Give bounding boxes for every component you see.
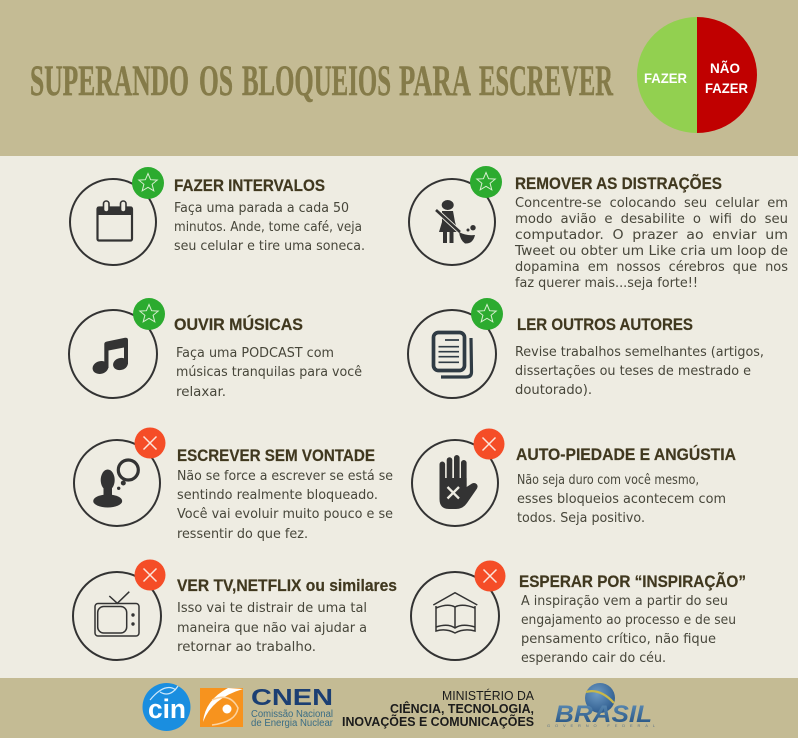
title: BLOQUEIOS [242,58,391,105]
item: ouvir músicas [69,298,362,400]
legend: fazer / não fazer: NÃO [710,59,740,76]
logo: ministério: INOVAÇÕES E COMUNICAÇÕES [342,714,534,729]
text: esperando cair do céu. [521,650,666,666]
text: Não seja duro com você mesmo, [517,472,699,488]
logo: cnen: de Energia Nuclear [251,718,334,729]
text: Concentre-se colocando seu celular em [515,195,788,211]
text: ressentir do que fez. [177,526,308,542]
text: Faça uma PODCAST com [176,345,334,361]
logo: brasil [547,683,656,728]
icon: documents [434,332,472,377]
item: escrever sem vontade [74,428,393,542]
legend: fazer / não fazer [637,17,757,133]
badge: cross [134,428,166,458]
text: todos. Seja positivo. [517,510,645,526]
icon: television [95,592,139,636]
text [517,472,726,526]
icon: calendar [97,201,132,240]
heading: REMOVER AS DISTRAÇÕES [515,173,722,193]
heading: OUVIR MÚSICAS [174,315,303,334]
text [515,344,764,398]
footer band with logos [0,678,798,738]
logo: ministério: MINISTÉRIO DA [442,688,534,703]
icon: open book [433,593,477,633]
title: SUPERANDO [30,58,189,105]
badge: star [132,167,164,199]
icon: stop hand [440,455,478,509]
icon: person thinking [93,460,138,508]
badge: star [133,298,165,330]
item: fazer intervalos [70,167,365,265]
item: remover as distrações [409,166,788,291]
item: esperar por inspiração [411,560,746,666]
badge: star [471,298,503,330]
text: modo avião e desabilite o wifi do seu [515,211,788,227]
title: ESCREVER [479,58,614,105]
icon: music note [91,338,129,376]
text: pensamento crítico, não fique [521,631,716,647]
text: minutos. Ande, tome café, veja [174,219,362,235]
text [174,200,365,254]
text: relaxar. [176,384,226,400]
heading: ESPERAR POR “INSPIRAÇÃO” [519,571,746,591]
heading: FAZER INTERVALOS [174,177,325,195]
text [176,345,362,400]
heading: ESCREVER SEM VONTADE [177,447,375,465]
text: Faça uma parada a cada 50 [174,200,349,216]
text [514,195,788,291]
item: ver tv, netflix [73,560,397,660]
logo: brasil: GOVERNO FEDERAL [547,723,656,728]
text [521,593,736,666]
logo: ministério [342,688,534,729]
text: retornar ao trabalho. [177,639,316,655]
title [30,58,614,105]
text: seu celular e tire uma soneca. [174,238,365,254]
badge: cross [474,428,504,460]
heading: VER TV,NETFLIX ou similares [177,577,397,595]
text [177,468,393,542]
logo: ministério: CIÊNCIA, TECNOLOGIA, [390,701,534,716]
text: esses bloqueios acontecem com [517,491,726,507]
heading: LER OUTROS AUTORES [517,316,693,334]
text: doutorado). [515,382,592,398]
text: Não se force a escrever se está se [177,468,393,484]
text [177,600,367,655]
text: A inspiração vem a partir do seu [521,593,728,609]
logo: cnen: Comissão Nacional [251,709,333,720]
text: faz querer mais...seja forte!! [515,275,698,291]
text: Você vai evoluir muito pouco e se [177,506,393,522]
title: PARA [399,58,471,105]
header band [0,0,798,156]
text: maneira que não vai ajudar a [177,620,367,636]
legend: fazer / não fazer: FAZER [644,70,687,86]
badge: cross [134,560,166,590]
text: Tweet ou obter um Like cria um loop de [514,243,788,259]
text: Revise trabalhos semelhantes (artigos, [515,344,764,360]
text: dissertações ou teses de mestrado e [515,363,751,379]
badge: star [470,166,502,198]
title: OS [199,58,233,105]
icon: person sweeping [436,200,476,244]
logo: cnen [200,684,334,729]
logo: cin: cin [148,694,186,724]
logo: cnen: CNEN [251,684,333,710]
text: sentindo realmente bloqueado. [177,487,378,503]
heading: AUTO-PIEDADE E ANGÚSTIA [516,445,736,464]
text: Isso vai te distrair de uma tal [177,600,367,616]
text: músicas tranquilas para você [176,364,362,380]
text: dopamina em nossos cérebros que nos [515,259,788,275]
legend: fazer / não fazer: FAZER [705,80,748,96]
item: auto-piedade e angústia [412,428,736,526]
logo: cin [142,683,190,731]
logo: brasil: BRASIL [555,701,652,728]
text: engajamento ao processo e de seu [521,612,736,628]
item: ler outros autores [408,298,764,398]
badge: cross [474,560,506,592]
text: computador. O prazer ao enviar um [515,227,788,243]
